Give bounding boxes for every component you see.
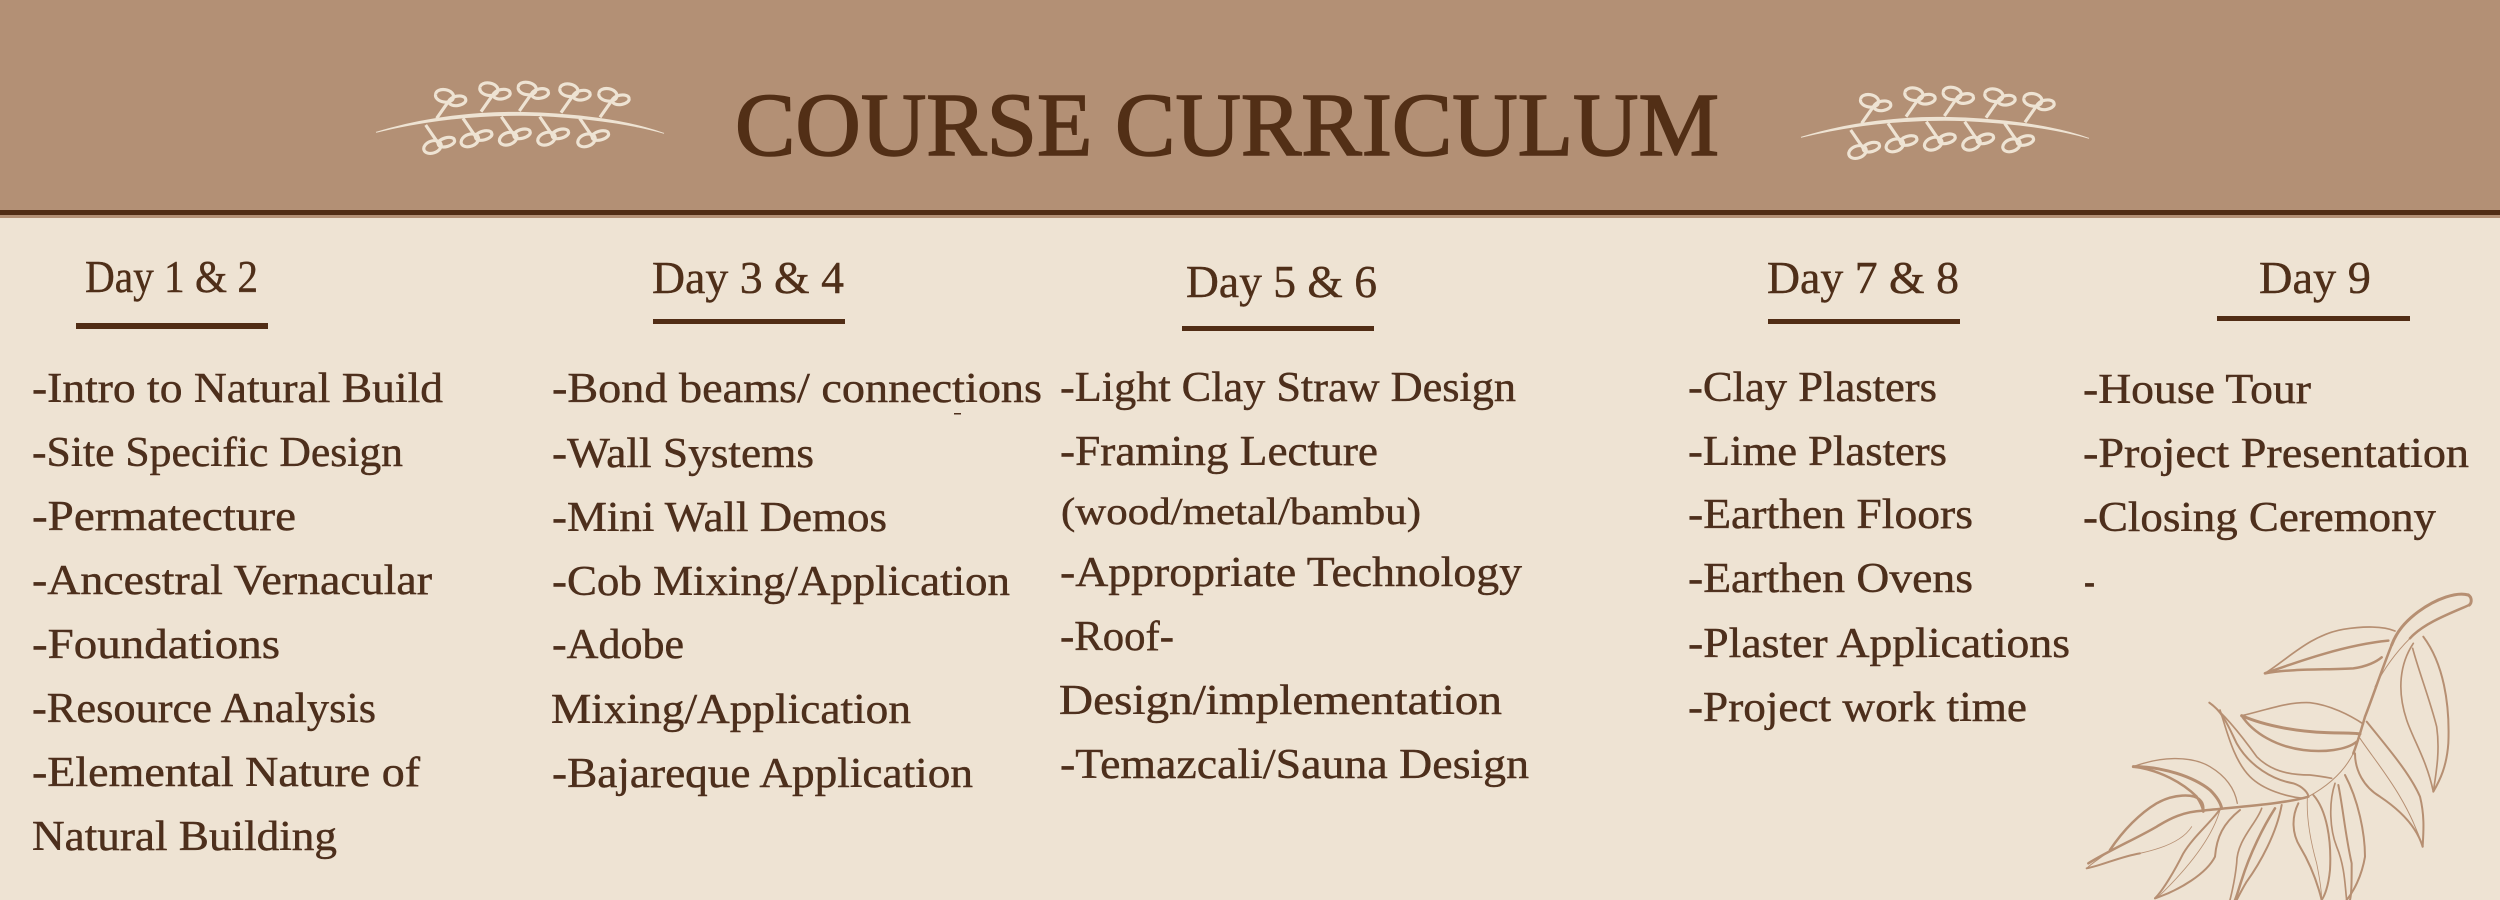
list: Day 3 & 4 topics: Mixing/Application	[551, 687, 911, 733]
list: Day 1 & 2 topics: -Elemental Nature of	[32, 750, 420, 796]
panel: Day 7 & 8	[1688, 253, 2070, 731]
heading: Day 9: Day 9	[2259, 253, 2371, 303]
list: Day 3 & 4 topics: -Bajareque Application	[552, 751, 973, 797]
list: Day 1 & 2 topics: -Ancestral Vernacular	[32, 558, 432, 604]
heading underline	[2217, 316, 2410, 321]
list: Day 1 & 2 topics: -Foundations	[32, 622, 280, 668]
heading: Day 1 & 2: Day 1 & 2	[85, 252, 258, 302]
list: Day 7 & 8 topics: -Clay Plasters	[1688, 365, 1937, 411]
list: Day 9 topics: -House Tour	[2083, 367, 2311, 413]
list: Day 5 & 6 topics: -Temazcali/Sauna Design	[1060, 742, 1529, 788]
list: Day 5 & 6 topics: -Roof-	[1060, 614, 1174, 660]
heading underline	[653, 319, 845, 324]
header banner	[0, 0, 2500, 218]
list: Day 3 & 4 topics: -Bond beams/ connections	[552, 366, 1042, 412]
panel: Day 3 & 4	[551, 253, 1042, 797]
list: Day 1 & 2 topics: -Site Specific Design	[32, 430, 403, 476]
panel: Day 5 & 6	[1059, 257, 1529, 788]
icon: left sprig ornament	[376, 82, 664, 153]
heading: Day 5 & 6: Day 5 & 6	[1186, 257, 1377, 307]
list: Day 5 & 6 topics	[1059, 365, 1529, 788]
heading underline	[1768, 319, 1960, 324]
list: Day 7 & 8 topics: -Lime Plasters	[1688, 429, 1947, 475]
list: Day 7 & 8 topics	[1688, 365, 2070, 731]
icon: leaf branch illustration	[2087, 594, 2471, 900]
list: Day 1 & 2 topics: -Permatecture	[32, 494, 296, 540]
list: Day 9 topics: -Project Presentation	[2083, 431, 2469, 477]
list: Day 7 & 8 topics: -Plaster Applications	[1688, 621, 2070, 667]
list: Day 3 & 4 topics: -Wall Systems	[552, 431, 814, 477]
heading underline	[1182, 326, 1374, 331]
list: Day 1 & 2 topics: -Intro to Natural Build	[32, 366, 443, 412]
title: COURSE CURRICULUM	[735, 76, 1719, 175]
list: Day 9 topics: -	[2084, 559, 2095, 605]
list: Day 3 & 4 topics: -Adobe	[552, 622, 684, 668]
list: Day 7 & 8 topics: -Earthen Ovens	[1688, 556, 1973, 602]
list: Day 1 & 2 topics	[32, 366, 443, 860]
list: Day 7 & 8 topics: -Earthen Floors	[1688, 492, 1973, 538]
list: Day 1 & 2 topics: Natural Building	[32, 814, 337, 860]
list: Day 3 & 4 topics	[551, 366, 1042, 797]
heading underline	[76, 323, 268, 329]
list: Day 5 & 6 topics: (wood/metal/bambu)	[1061, 491, 1421, 533]
list: Day 5 & 6 topics: -Framing Lecture	[1060, 429, 1378, 475]
list: Day 1 & 2 topics: -Resource Analysis	[32, 686, 376, 732]
heading: Day 7 & 8: Day 7 & 8	[1767, 253, 1959, 303]
icon: right sprig ornament	[1801, 87, 2089, 158]
list: Day 5 & 6 topics: -Appropriate Technology	[1060, 550, 1522, 596]
list: Day 9 topics	[2083, 367, 2469, 605]
heading: Day 3 & 4: Day 3 & 4	[652, 253, 844, 303]
list: Day 3 & 4 topics: -Cob Mixing/Application	[552, 559, 1010, 605]
panel: Day 9	[2083, 253, 2469, 605]
list: Day 3 & 4 topics: -Mini Wall Demos	[552, 495, 887, 541]
list: Day 5 & 6 topics: Design/implementation	[1059, 678, 1502, 724]
panel: Day 1 & 2	[32, 252, 443, 860]
list: Day 5 & 6 topics: -Light Clay Straw Design	[1060, 365, 1516, 411]
list: Day 7 & 8 topics: -Project work time	[1688, 685, 2027, 731]
list: Day 9 topics: -Closing Ceremony	[2083, 495, 2436, 541]
